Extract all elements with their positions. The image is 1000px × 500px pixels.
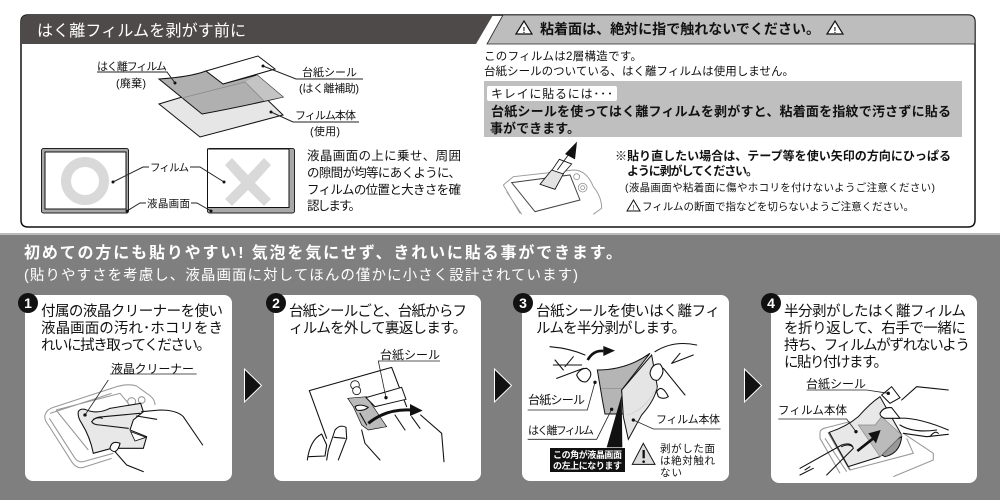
text: reapplying note: ※貼り直したい場合は、テープ等を使い矢印の方向にひっぱる	[615, 148, 951, 163]
step 2 card: 台紙シールごと、台紙からフ	[289, 303, 467, 320]
layered film diagram: フィルム本体	[295, 108, 356, 122]
leaders: step 4 labels	[778, 390, 890, 433]
callout: how to apply cleanly: 事ができます。	[490, 121, 580, 136]
callout: this corner goes top-left: この角が液晶画面	[553, 449, 622, 460]
labels: film and LCD screen: フィルム	[150, 162, 189, 174]
labels: film and LCD screen: 液晶画面	[147, 198, 190, 210]
step 1 card: れいに拭き取ってください。	[41, 337, 211, 354]
step 2 card	[266, 293, 481, 481]
layered film diagram: (廃棄)	[116, 77, 146, 90]
text: placement instructions: の隙間が均等にあくように、	[307, 165, 461, 180]
text: reapplying note: (液晶画面や粘着面に傷やホコリを付けないようご注意ください)	[625, 181, 935, 194]
layered film diagram: (使用)	[310, 125, 340, 138]
illustration: peeling film halfway	[550, 343, 697, 447]
text: placement instructions: 認します。	[307, 199, 361, 213]
arrow 1	[244, 369, 262, 402]
illustration: wiping screen with cleaner	[45, 374, 203, 472]
text: two layer structure: 台紙シールのついている、はく離フィルムは使用しません。	[484, 64, 794, 78]
layered film diagram: はく離フィルム	[97, 59, 167, 73]
panel: before peeling	[21, 15, 975, 227]
warning text: ない	[660, 467, 682, 479]
heading bar: do not touch adhesive: 粘着面は、絶対に指で触れないでください。	[540, 21, 820, 37]
step 4 card: フィルム本体	[778, 403, 848, 417]
step 2 card: 2	[272, 295, 280, 311]
layered film diagram	[97, 56, 363, 138]
step 4 card: を折り返して、右手で一緒に	[784, 320, 966, 337]
heading bar: before peeling: はく離フィルムを剥がす前に	[37, 22, 246, 40]
heading bar: do not touch adhesive: !	[523, 26, 525, 35]
callout: this corner goes top-left: の左上になります	[553, 460, 622, 471]
text: two layer structure: このフィルムは2層構造です。	[484, 49, 642, 63]
text: reapplying note: フィルムの断面で指などを切らないようご注意ください。	[642, 200, 914, 213]
step 3 card: 台紙シール	[528, 392, 585, 407]
arrow 2	[494, 369, 512, 402]
step 3 card: ルムを半分剥がします。	[536, 320, 686, 337]
text: placement instructions	[307, 149, 461, 213]
leaders: step 3 labels	[528, 381, 721, 464]
heading bar: before peeling	[21, 15, 493, 44]
warning text: 剥がした面	[660, 442, 715, 455]
text: placement instructions: 液晶画面の上に乗せ、周囲	[307, 149, 461, 163]
illustration: removing film from backing	[307, 361, 444, 462]
step 2 card: 台紙シール	[380, 347, 440, 362]
step 3 card: フィルム本体	[656, 412, 720, 426]
step 1 card	[18, 293, 232, 481]
diagram: correct film placement	[42, 148, 128, 213]
text: two layer structure	[484, 49, 794, 78]
step 1 card: 液晶画面の汚れ･ホコリをき	[41, 320, 223, 337]
callout: this corner goes top-left	[550, 448, 625, 472]
step 3 card: 台紙シールを使いはく離フィ	[536, 303, 720, 320]
warning text: は絶対触れ	[660, 454, 716, 467]
illustration: peeling film with tape	[503, 142, 602, 214]
callout: how to apply cleanly	[484, 81, 962, 137]
step 2 card: ィルムを外して裏返します。	[289, 320, 467, 337]
step 4 card: 4	[767, 295, 775, 311]
step 3 card: 3	[519, 295, 527, 311]
step 4 card: 半分剥がしたはく離フィルム	[784, 303, 966, 320]
callout: how to apply cleanly: 台紙シールを使ってはく離フィルムを剥がすと、粘着面を指紋で汚さずに貼る	[491, 104, 951, 119]
layered film diagram: 台紙シール	[302, 65, 357, 79]
panel: steps background	[0, 235, 1000, 500]
step 4 card	[761, 293, 977, 483]
heading bar: do not touch adhesive: !	[834, 26, 836, 35]
labels: film and LCD screen	[112, 162, 226, 212]
step 1 card: 付属の液晶クリーナーを使い	[41, 303, 223, 320]
callout: how to apply cleanly: キレイに貼るには･･･	[491, 86, 613, 101]
step 3 card	[513, 293, 729, 481]
subheading: slightly smaller design: (貼りやすさを考慮し、液晶画面に対してほんの僅かに小さく設計されています)	[24, 267, 578, 284]
heading bar: do not touch adhesive	[487, 15, 975, 44]
warning text	[660, 442, 716, 479]
step 4 card: に貼り付けます。	[784, 354, 888, 371]
heading: easy to apply: 初めての方にも貼りやすい! 気泡を気にせず、きれいに貼る事ができます。	[24, 243, 622, 262]
text: placement instructions: フィルムの位置と大きさを確	[307, 182, 461, 197]
layered film diagram: (はく離補助)	[299, 81, 359, 95]
step 4 card: 持ち、フィルムがずれないよう	[784, 337, 970, 354]
step 4 card: 台紙シール	[806, 376, 866, 391]
step 1 card: 液晶クリーナー	[111, 362, 194, 376]
text: reapplying note: ように剥がしてください。	[627, 163, 758, 178]
gray band divider	[0, 233, 1000, 235]
diagram: incorrect film placement	[208, 148, 294, 213]
step 3 card: はく離フィルム	[528, 423, 594, 437]
step 1 card: 1	[24, 295, 32, 311]
arrow 3	[744, 369, 762, 402]
illustration: applying film	[800, 387, 948, 477]
text: reapplying note	[615, 148, 951, 213]
text: reapplying note: !	[633, 205, 635, 212]
